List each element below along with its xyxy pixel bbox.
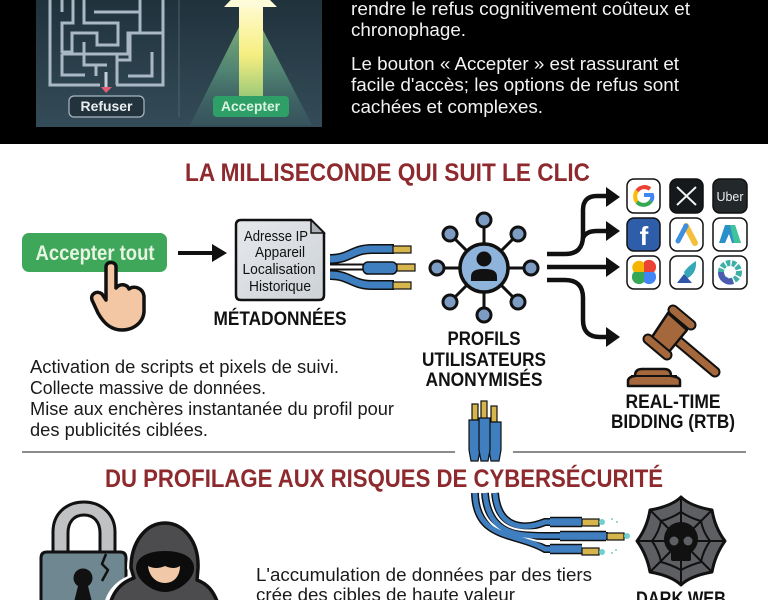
heading: profiling to cybersecurity risks: DU PROFILAGE AUX RISQUES DE CYBERSÉCURITÉ bbox=[105, 464, 663, 493]
logo: pinwheel bbox=[627, 256, 660, 289]
arrow: click to metadata bbox=[178, 244, 227, 262]
heading: la milliseconde: LA MILLISECONDE QUI SUIT LE CLIC bbox=[185, 159, 590, 187]
icon: hooded hacker bbox=[108, 523, 218, 600]
label: real-time bidding: REAL-TIME bbox=[626, 392, 720, 413]
icon: metadata document: Localisation bbox=[242, 261, 316, 278]
Accepter button bbox=[213, 96, 289, 117]
icon: metadata document: Historique bbox=[249, 278, 311, 295]
icon: pointing hand bbox=[92, 262, 144, 330]
intro text: cachées et complexes. bbox=[351, 97, 543, 117]
icon: maze bbox=[50, 0, 163, 85]
text: data collection bbox=[30, 357, 394, 440]
label: real-time bidding bbox=[611, 392, 735, 433]
label: anonymised profiles bbox=[422, 329, 546, 391]
text: data collection: des publicités ciblées. bbox=[30, 420, 208, 440]
icon: broken padlock bbox=[41, 502, 126, 600]
text: third-party data accumulation: L'accumulation de données par des tiers bbox=[256, 565, 592, 585]
logo: Google bbox=[627, 179, 660, 213]
logo: gear bbox=[713, 256, 747, 289]
label: anonymised profiles: ANONYMISÉS bbox=[426, 369, 542, 391]
text: data collection: Collecte massive de données. bbox=[30, 378, 266, 398]
icon: metadata document: Appareil bbox=[255, 244, 305, 261]
accept all button bbox=[22, 233, 167, 272]
label: real-time bidding: BIDDING (RTB) bbox=[611, 412, 735, 433]
logo: Google Ads bbox=[670, 218, 703, 251]
logo: Uber: Uber bbox=[716, 189, 744, 204]
icon: user profile network bbox=[430, 213, 538, 322]
logo: Azure style bbox=[713, 218, 747, 251]
Accepter button: Accepter bbox=[221, 98, 281, 114]
arrows: profiles to advertisers and auction bbox=[547, 187, 620, 347]
Refuser button bbox=[69, 96, 144, 117]
intro text bbox=[351, 0, 690, 117]
black top band bbox=[0, 0, 768, 144]
icon: metadata document: Adresse IP bbox=[244, 228, 308, 245]
Refuser button: Refuser bbox=[80, 98, 133, 114]
logo: X bbox=[670, 179, 703, 213]
intro text: facile d'accès; les options de refus sont bbox=[351, 75, 679, 95]
text: data collection: Mise aux enchères instantanée du profil pour bbox=[30, 399, 394, 419]
icon: dark web skull in web bbox=[637, 497, 725, 585]
logo: wing bbox=[670, 256, 703, 289]
icon: cables to dark web bbox=[475, 493, 630, 555]
icon: maze exit arrow bbox=[101, 72, 112, 93]
label: metadata: MÉTADONNÉES bbox=[214, 308, 346, 330]
label: anonymised profiles: UTILISATEURS bbox=[422, 350, 546, 371]
intro text: chronophage. bbox=[351, 20, 466, 40]
icon: auction gavel bbox=[628, 310, 715, 386]
text: third-party data accumulation bbox=[256, 565, 592, 600]
icon: vertical cables bbox=[469, 401, 501, 461]
accept all button: Accepter tout bbox=[36, 242, 154, 265]
advertiser logo grid bbox=[627, 179, 747, 289]
icon: data cables bbox=[330, 246, 415, 289]
icon: metadata document bbox=[236, 220, 324, 300]
illustration panel: maze versus accept bbox=[36, 0, 322, 127]
label: anonymised profiles: PROFILS bbox=[448, 329, 520, 350]
icon: glowing arrow bbox=[190, 0, 312, 125]
logo: Facebook: f bbox=[640, 221, 649, 251]
intro text: Le bouton « Accepter » est rassurant et bbox=[351, 54, 679, 74]
text: data collection: Activation de scripts et pixels de suivi. bbox=[30, 357, 339, 377]
